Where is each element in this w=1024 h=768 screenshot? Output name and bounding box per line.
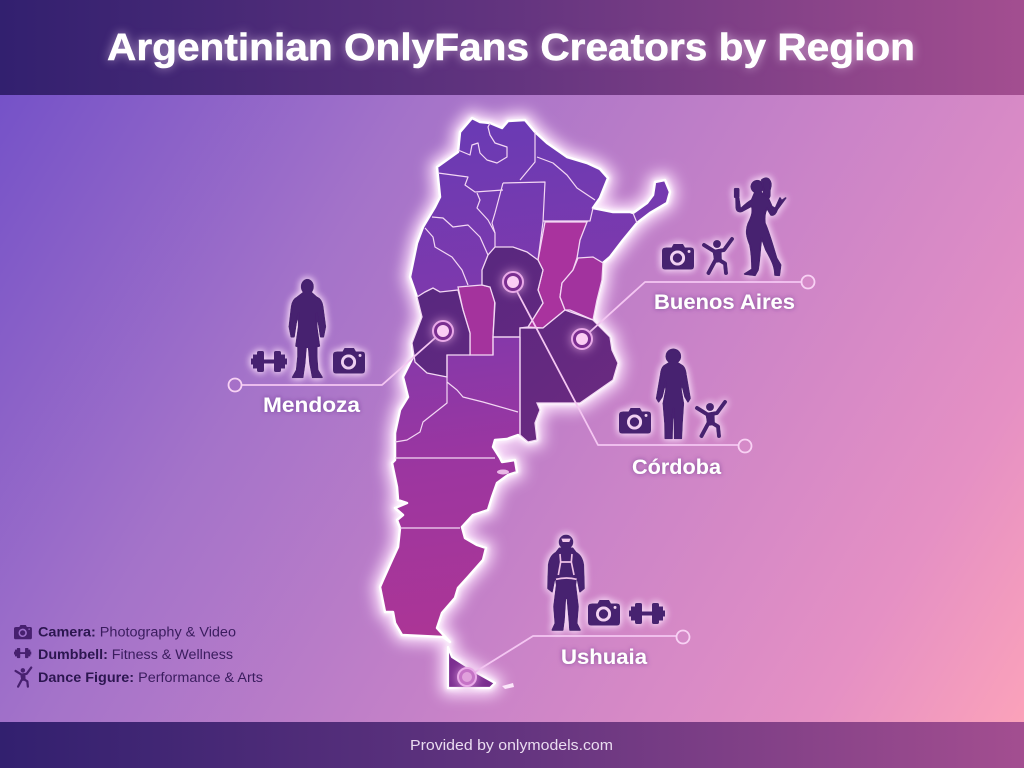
icon: dumbbell <box>629 603 665 624</box>
footer credit: Provided by onlymodels.com <box>410 737 613 754</box>
icon: standing woman <box>657 349 690 438</box>
gulf <box>497 470 509 474</box>
legend: dance figure: Dance Figure: Performance & Arts <box>38 670 263 685</box>
icon: dance figure <box>704 239 732 273</box>
header bar <box>0 0 1024 95</box>
island <box>502 683 514 689</box>
marker: Ushuaia <box>458 668 476 686</box>
icon: selfie woman <box>735 178 786 275</box>
map of Argentina <box>380 118 670 689</box>
label: Córdoba: Córdoba <box>632 456 721 479</box>
group: Ushuaia icons <box>548 535 665 630</box>
province: Buenos Aires <box>520 310 618 442</box>
label: Mendoza: Mendoza <box>263 394 360 417</box>
label: Buenos Aires: Buenos Aires <box>654 291 795 314</box>
marker: Buenos Aires <box>572 329 592 349</box>
map inner glow <box>380 118 670 688</box>
province: Córdoba <box>482 247 543 337</box>
group: Buenos Aires icons <box>662 178 786 275</box>
icon: camera <box>588 600 620 626</box>
end ring: Buenos Aires <box>802 276 814 288</box>
province: Mendoza <box>412 288 470 377</box>
country land <box>380 118 670 642</box>
group: Mendoza icons <box>251 280 365 377</box>
end ring: Mendoza <box>228 378 242 392</box>
title: Argentinian OnlyFans Creators by Region <box>107 27 915 69</box>
callout lines <box>242 282 801 677</box>
footer bar <box>0 722 1024 768</box>
icon: mountaineer <box>548 535 584 630</box>
legend: camera: Camera: Photography & Video <box>38 624 236 640</box>
legend: dumbbell: Dumbbell: Fitness & Wellness <box>38 647 233 662</box>
icon: muscular man <box>289 280 325 377</box>
end ring: Córdoba <box>738 440 752 452</box>
icon: dumbbell <box>251 351 287 372</box>
province: San Luis <box>458 285 495 355</box>
legend: dance figure <box>16 668 263 687</box>
province: Entre Ríos <box>560 257 603 320</box>
icon: camera <box>619 408 651 434</box>
icon: camera <box>333 348 365 374</box>
province: Santa Fe <box>528 222 587 328</box>
group: Córdoba icons <box>619 349 725 438</box>
map halo <box>380 118 670 688</box>
label: Ushuaia: Ushuaia <box>561 646 647 669</box>
province: Tierra del Fuego <box>448 647 495 688</box>
icon: camera <box>662 244 694 270</box>
end ring: Ushuaia <box>676 630 690 644</box>
marker: Córdoba <box>503 272 523 292</box>
province borders <box>395 123 637 528</box>
icon: dance figure <box>697 402 725 436</box>
marker: Mendoza <box>433 321 453 341</box>
legend <box>14 624 263 687</box>
